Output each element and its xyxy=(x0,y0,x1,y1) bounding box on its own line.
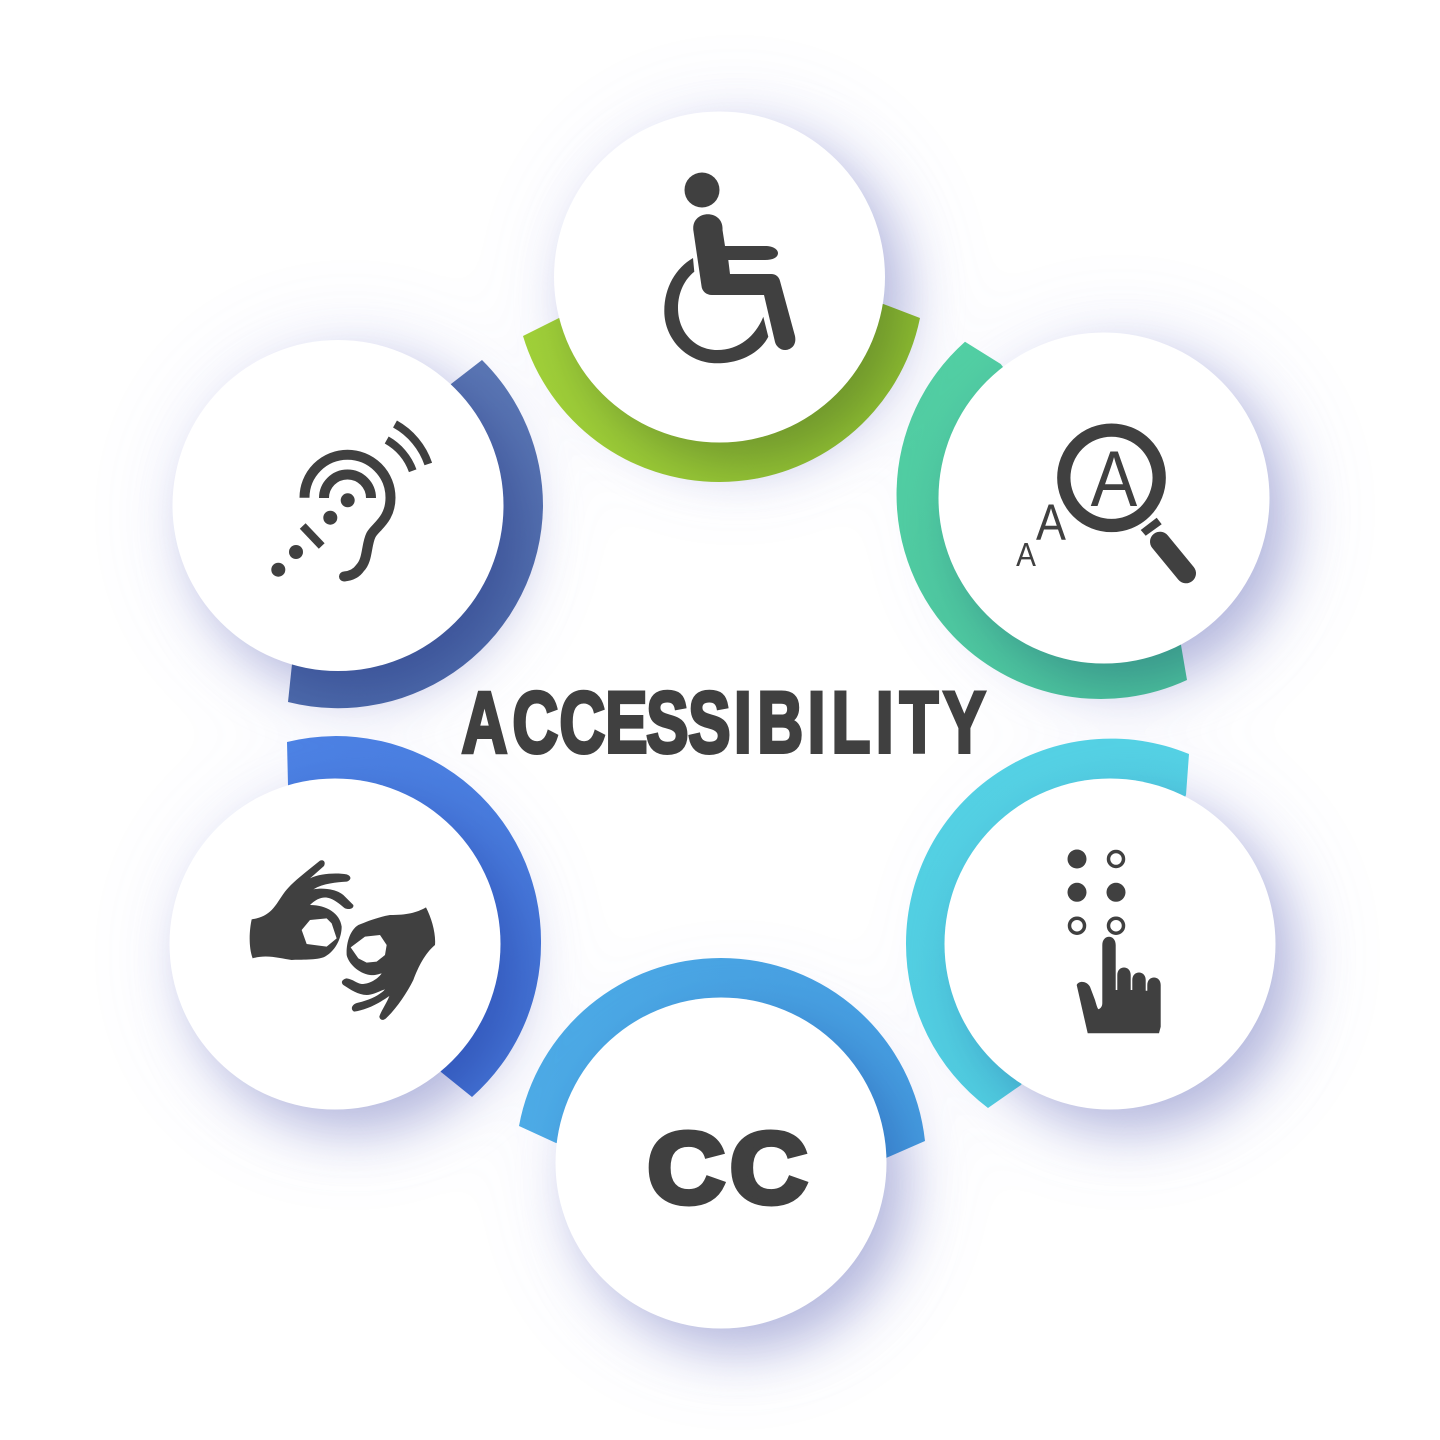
circle: magnifier xyxy=(938,332,1270,664)
icon: braille and pointing hand xyxy=(1068,850,1161,1033)
circle shadows xyxy=(190,134,1295,1350)
icon: magnifier with letters xyxy=(1016,430,1186,573)
icon: magnifier with letters: A xyxy=(1091,434,1138,523)
title: ACCESSIBILITY xyxy=(462,674,985,771)
background halo xyxy=(178,118,1297,1347)
arc: sky blue xyxy=(519,958,925,1163)
circle: braille xyxy=(944,778,1276,1110)
icon: closed captions text: CC xyxy=(647,1112,807,1224)
icon: sign language hands xyxy=(250,860,435,1020)
icon: assistive listening ear xyxy=(271,424,428,582)
icon: wheelchair xyxy=(664,172,795,363)
circle: closed captions xyxy=(556,998,886,1328)
circle: hearing xyxy=(172,340,504,671)
icon: magnifier with letters: A xyxy=(1016,537,1036,573)
arc: slate blue xyxy=(288,360,543,708)
arc: royal blue xyxy=(287,736,541,1097)
arc: teal green xyxy=(897,342,1187,699)
icon: magnifier with letters: A xyxy=(1036,495,1066,552)
circle: sign language xyxy=(170,778,500,1110)
circle: wheelchair xyxy=(554,112,885,442)
arc: cyan xyxy=(906,739,1189,1108)
arc: green xyxy=(523,277,920,482)
